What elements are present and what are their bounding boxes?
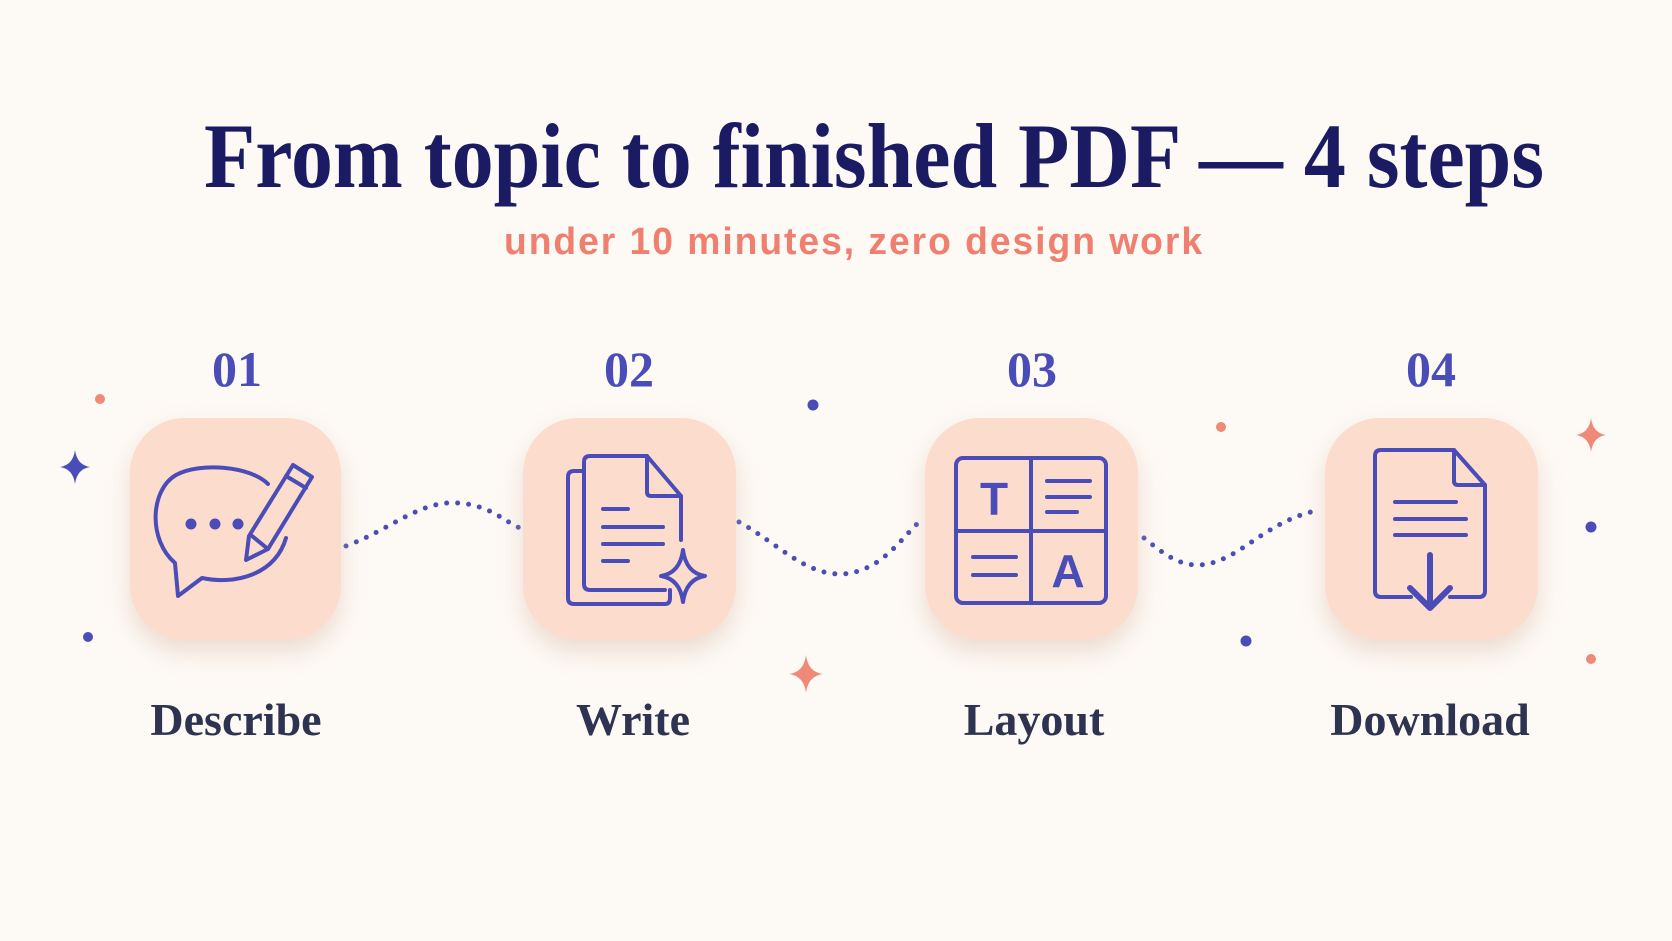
- decorations: [60, 394, 1606, 693]
- icon box: download: [1325, 418, 1538, 640]
- step 2: [523, 341, 736, 745]
- label: Download: Download: [1330, 694, 1530, 745]
- number: 04: 04: [1406, 341, 1456, 397]
- icon box: write: [523, 418, 736, 640]
- number: 03: 03: [1007, 341, 1057, 397]
- connector: 1 to 2: [346, 503, 520, 546]
- label: Write: Write: [576, 694, 690, 745]
- icon box: layout: T: [980, 473, 1008, 525]
- step 3: [925, 341, 1138, 745]
- step 1: [130, 341, 341, 745]
- connector: 3 to 4: [1144, 510, 1320, 565]
- subtitle: under 10 minutes, zero design work: [504, 221, 1204, 263]
- number: 02: 02: [604, 341, 654, 397]
- icon box: layout: A: [1051, 545, 1085, 597]
- label: Describe: Describe: [150, 694, 322, 745]
- connector: 2 to 3: [739, 522, 919, 574]
- step 4: [1325, 341, 1538, 745]
- label: Layout: Layout: [964, 694, 1105, 745]
- icon box: layout: [925, 418, 1138, 640]
- icon box: describe: [130, 418, 341, 640]
- title: From topic to finished PDF — 4 steps: [204, 105, 1544, 207]
- number: 01: 01: [212, 341, 262, 397]
